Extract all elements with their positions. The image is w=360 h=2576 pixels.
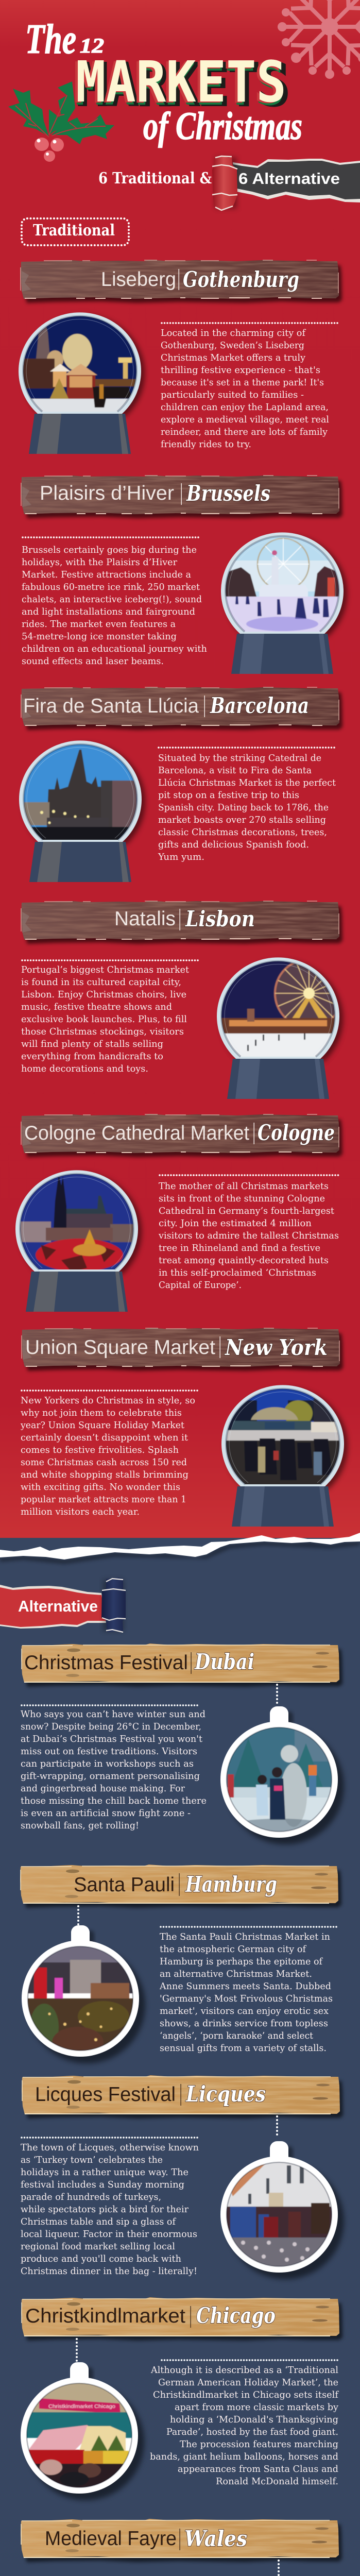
title: MARKETS <box>77 52 289 118</box>
text: Lisbon description: everything from handicrafts to <box>21 1051 163 1062</box>
torn paper reveal: 6 traditional and 6 alternative: 6 Traditional & <box>98 170 212 188</box>
text: Gothenburg description: children can enjoy the Lapland area, <box>161 402 329 413</box>
text: Barcelona description: pit stop on a festive trip to this <box>158 790 299 801</box>
text: Cologne description: Cathedral in Germany’s fourth-largest <box>159 1206 335 1216</box>
plank heading: Christmas Festival Dubai: Christmas Festival <box>24 1652 188 1674</box>
text: Cologne description <box>158 1175 339 1291</box>
text: Chicago description: holding a ‘McDonald's Thanksgiving <box>170 2414 338 2425</box>
plank heading: Medieval Fayre Wales: Wales <box>184 2526 247 2551</box>
text: New York description: year? Union Square Holiday Market <box>20 1420 185 1431</box>
title: MARKETS <box>73 50 284 116</box>
plank heading: Fira de Santa Llucia Barcelona: Fira de Santa Llúcia <box>23 695 199 717</box>
text: Chicago description: Ronald McDonald himself. <box>216 2476 338 2487</box>
text: Cologne description: visitors to admire the tallest Christmas <box>158 1230 339 1241</box>
text: Dubai description: snowball fans, get rolling! <box>21 1820 139 1831</box>
text: Chicago description: The procession features marching <box>180 2439 338 2450</box>
text: Licques description: parade of hundreds of turkeys, <box>21 2192 161 2202</box>
text: Chicago description: bands, giant helium balloons, horses and <box>150 2451 338 2462</box>
plank heading: Natalis Lisbon: Natalis <box>114 908 176 930</box>
text: Brussels description: 54-metre-long ice monster taking <box>22 631 177 642</box>
snow globe: Barcelona <box>19 740 145 882</box>
text: Dubai description: at Dubai’s Christmas Festival you won't <box>21 1734 203 1744</box>
text: Brussels description: fabulous 60-metre ice rink, 250 market <box>22 582 200 592</box>
title: 12 <box>80 34 104 57</box>
plank heading: Fira de Santa Llucia Barcelona: Barcelona <box>210 693 309 718</box>
title: MARKETS <box>75 52 285 118</box>
text: Gothenburg description: thrilling festive experience - that's <box>161 365 320 376</box>
text: Barcelona description: Spanish city. Dating back to 1786, the <box>158 802 329 813</box>
snowflake decoration <box>278 0 360 79</box>
hanging thread: Licques <box>276 2116 278 2138</box>
plank heading: Liseberg Gothenburg <box>21 260 342 303</box>
text: Gothenburg description: particularly suited to families - <box>161 389 304 400</box>
text: Brussels description: children on an educational journey with <box>22 643 207 654</box>
plank heading: Plaisirs d'Hiver Brussels: Brussels <box>186 481 270 506</box>
plank heading: Medieval Fayre Wales: Medieval Fayre <box>45 2528 177 2550</box>
background: red section <box>0 0 360 1566</box>
text: Hamburg description: market', visitors can enjoy erotic sex <box>160 2006 329 2016</box>
text: Licques description: Christmas dinner in the bag - literally! <box>21 2266 197 2277</box>
text: Chicago description <box>150 2360 339 2487</box>
text: Hamburg description: 'Germany's Most Frivolous Christmas <box>160 1993 333 2004</box>
plank heading: Santa Pauli Hamburg <box>20 1865 341 1908</box>
text: Licques description <box>21 2138 199 2277</box>
text: New York description: and white shopping stalls brimming <box>21 1469 188 1480</box>
text: Dubai description: is even an artificial snow fight zone - <box>21 1808 191 1819</box>
text: Chicago description: appearances from Santa Claus and <box>178 2464 338 2475</box>
text: New York description <box>20 1391 199 1517</box>
text: Chicago description: Although it is described as a ‘Traditional <box>150 2365 338 2376</box>
text: New York description: certainly doesn’t disappoint when it <box>21 1432 188 1443</box>
text: Brussels description: chalets, an interactive iceberg(!), sound <box>22 594 202 605</box>
text: Cologne description: city. Join the estimated 4 million <box>159 1218 312 1229</box>
text: Lisbon description: home decorations and toys. <box>21 1063 148 1074</box>
plank heading: Plaisirs d'Hiver Brussels: Plaisirs d’Hiver <box>40 482 174 504</box>
bauble: Chicago <box>21 2362 144 2500</box>
text: Chicago description: German American Holiday Market’, the <box>158 2377 338 2388</box>
text: Barcelona description: Barcelona, a visit to Fira de Santa <box>158 765 312 776</box>
bauble: Licques <box>220 2141 344 2279</box>
text: Lisbon description: Lisbon. Enjoy Christmas choirs, live <box>21 989 186 1000</box>
hanging thread: Hamburg <box>77 1906 79 1925</box>
plank heading: Medieval Fayre Wales <box>21 2519 342 2562</box>
text: Hamburg description: an alternative Christmas Market. <box>160 1969 312 1979</box>
text: Hamburg description <box>159 1927 338 2054</box>
plank heading: Cologne Cathedral Market Cologne: Cologne Cathedral Market <box>24 1122 249 1144</box>
text: New York description: million visitors each year. <box>21 1506 140 1517</box>
text: Lisbon description: exclusive book launches. Plus, to fill <box>21 1014 187 1025</box>
text: Gothenburg description: Located in the charming city of <box>161 328 306 338</box>
plank heading: Licques Festival Licques: Licques Festival <box>35 2083 176 2106</box>
text: Brussels description: sound effects and laser beams. <box>22 656 164 667</box>
text: Licques description: regional food market selling local <box>21 2241 175 2252</box>
plank heading: Licques Festival Licques: Licques <box>185 2081 266 2107</box>
plank heading: Liseberg Gothenburg: Liseberg <box>101 268 176 291</box>
text: Hamburg description: shows, a drinks service from topless <box>160 2018 328 2029</box>
plank heading: Union Square Market New York <box>22 1328 343 1371</box>
text: Lisbon description <box>21 960 199 1074</box>
text: Brussels description: holidays, with the Plaisirs d’Hiver <box>22 557 177 568</box>
text: Brussels description: Brussels certainly goes big during the <box>22 545 197 555</box>
holly leaves and berries <box>8 81 114 162</box>
section label: traditional: Traditional <box>33 222 115 240</box>
text: Chicago description: apart from more classic markets by <box>175 2402 339 2413</box>
background: navy section <box>0 1538 360 2576</box>
bauble: Chicago: Christkindlmarket Chicago <box>48 2404 115 2410</box>
plank heading: Cologne Cathedral Market Cologne: Cologne <box>258 1120 335 1145</box>
section label: traditional <box>22 218 129 245</box>
text: Chicago description: Parade’, hosted by the fast food giant. <box>166 2427 338 2437</box>
plank heading: Christkindlmarket Chicago: Chicago <box>196 2303 276 2328</box>
text: Hamburg description: The Santa Pauli Christmas Market in <box>160 1931 330 1942</box>
text: Dubai description: gift-wrapping, ornament personalising <box>21 1771 200 1782</box>
hanging thread: Wales <box>278 2561 280 2576</box>
text: Cologne description: in this self-proclaimed ‘Christmas <box>159 1267 316 1278</box>
plank heading: Natalis Lisbon: Lisbon <box>185 906 255 931</box>
text: Gothenburg description: reindeer, and there are lots of family <box>161 427 328 437</box>
text: Barcelona description: Situated by the striking Catedral de <box>158 753 321 764</box>
text: Dubai description: Who says you can’t have winter sun and <box>21 1709 205 1720</box>
plank heading: Santa Pauli Hamburg: Santa Pauli <box>74 1874 175 1896</box>
plank heading: Licques Festival Licques <box>22 2075 343 2119</box>
text: Gothenburg description: explore a medieval village, meet real <box>161 414 329 425</box>
snow globe: New York <box>221 1385 348 1527</box>
text: Cologne description: The mother of all Christmas markets <box>159 1181 329 1192</box>
text: Cologne description: tree in Rhineland and find a festive <box>159 1243 320 1253</box>
plank heading: Christkindlmarket Chicago <box>21 2297 342 2341</box>
text: Hamburg description: Anne Summers meets Santa. Dubbed <box>159 1981 331 1992</box>
text: Barcelona description: market boasts over 270 stalls selling <box>158 815 326 825</box>
plank heading: Union Square Market New York: New York <box>224 1335 328 1360</box>
text: Cologne description: treat among quaintly-decorated huts <box>159 1255 329 1266</box>
text: New York description: why not join them to celebrate this <box>21 1408 182 1418</box>
text: Hamburg description: ‘angels’, ‘porn karaoke’ and select <box>160 2030 314 2041</box>
section label: alternative torn banner: Alternative <box>18 1597 98 1615</box>
text: Licques description: local liqueur. Factor in their enormous <box>21 2229 197 2240</box>
text: Dubai description <box>21 1705 207 1831</box>
text: Chicago description: Christkindlmarket in Chicago sets itself <box>153 2389 339 2400</box>
torn paper reveal: 6 traditional and 6 alternative <box>98 156 360 210</box>
text: Lisbon description: will find plenty of stalls selling <box>21 1039 163 1049</box>
text: New York description: New Yorkers do Christmas in style, so <box>21 1395 195 1406</box>
plank heading: Fira de Santa Llucia Barcelona <box>21 687 342 730</box>
bauble: Dubai <box>220 1706 344 1844</box>
text: Brussels description: rides. The market even features a <box>22 619 176 630</box>
text: Lisbon description: those Christmas stockings, visitors <box>21 1026 184 1037</box>
text: Licques description: festival includes a Sunday morning <box>21 2179 184 2190</box>
plank heading: Cologne Cathedral Market Cologne <box>21 1114 342 1157</box>
text: New York description: with exciting gifts. No wonder this <box>21 1482 180 1493</box>
text: New York description: popular market attracts more than 1 <box>21 1494 186 1505</box>
text: Gothenburg description: friendly rides to try. <box>161 439 251 450</box>
text: Gothenburg description: because it's set in a theme park! It's <box>161 377 324 388</box>
bauble: Hamburg <box>22 1925 145 2063</box>
text: New York description: comes to festive frivolities. Splash <box>21 1445 179 1455</box>
text: New York description: some Christmas cash across 150 red <box>21 1457 187 1468</box>
snow globe: Cologne <box>15 1170 142 1312</box>
text: Barcelona description: Yum yum. <box>158 852 204 862</box>
text: Gothenburg description: Gothenburg, Sweden’s Liseberg <box>161 340 304 351</box>
text: Hamburg description: the atmospheric German city of <box>160 1944 306 1955</box>
text: Brussels description: and light installations and fairground <box>22 606 195 617</box>
text: Hamburg description: sensual gifts from a variety of stalls. <box>160 2043 327 2054</box>
text: Dubai description: those missing the chill back home there <box>21 1795 207 1806</box>
plank heading: Union Square Market New York: Union Square Market <box>25 1336 215 1359</box>
snow globe: Lisbon <box>216 957 343 1099</box>
text: Dubai description: miss out on festive traditions. Visitors <box>21 1746 197 1757</box>
hanging thread: Dubai <box>276 1685 278 1706</box>
plank heading: Natalis Lisbon <box>21 901 342 944</box>
plank heading: Santa Pauli Hamburg: Hamburg <box>185 1872 277 1897</box>
text: Barcelona description: gifts and delicious Spanish food. <box>158 839 309 850</box>
text: Cologne description: sits in front of the stunning Cologne <box>159 1193 325 1204</box>
text: Licques description: while spectators pick a bird for their <box>21 2204 188 2215</box>
title: MARKETS <box>76 49 286 115</box>
text: Lisbon description: Portugal’s biggest Christmas market <box>21 964 190 975</box>
text: Licques description: holidays in a rather unique way. The <box>21 2167 188 2178</box>
plank heading: Liseberg Gothenburg: Gothenburg <box>183 267 299 292</box>
text: Licques description: as ‘Turkey town’ celebrates the <box>21 2155 163 2165</box>
torn paper divider between red and navy sections <box>0 1533 360 1564</box>
plank heading: Christkindlmarket Chicago: Christkindlmarket <box>25 2305 185 2327</box>
text: Cologne description: Capital of Europe’. <box>159 1280 242 1291</box>
text: Gothenburg description <box>161 323 339 450</box>
text: Hamburg description: Hamburg is perhaps the epitome of <box>160 1956 323 1967</box>
title <box>25 15 302 148</box>
hanging thread: Chicago <box>76 2339 78 2362</box>
text: Barcelona description: Llúcia Christmas Market is the perfect <box>158 777 336 788</box>
text: Lisbon description: is found in its cultured capital city, <box>21 977 181 988</box>
text: Lisbon description: music, festive theatre shows and <box>21 1002 172 1012</box>
plank heading: Plaisirs d'Hiver Brussels <box>21 475 342 518</box>
text: Dubai description: can participate in workshops such as <box>21 1758 194 1769</box>
text: Dubai description: and gingerbread house making. For <box>21 1783 185 1794</box>
text: Licques description: The town of Licques, otherwise known <box>21 2142 199 2153</box>
text: Dubai description: snow? Despite being 26°C in December, <box>21 1721 201 1732</box>
text: Barcelona description <box>158 748 336 862</box>
plank heading: Christmas Festival Dubai: Dubai <box>194 1649 254 1674</box>
title: The <box>25 15 76 62</box>
snow globe: Gothenburg <box>18 312 145 454</box>
text: Gothenburg description: Christmas Market offers a truly <box>161 352 306 363</box>
text: Licques description: Christmas table and sip a glass of <box>21 2216 176 2227</box>
text: Barcelona description: classic Christmas decorations, trees, <box>158 827 327 838</box>
plank heading: Christmas Festival Dubai <box>21 1643 342 1687</box>
text: Brussels description <box>22 537 207 667</box>
text: Brussels description: Market. Festive attractions include a <box>22 569 191 580</box>
snow globe: Brussels <box>220 532 347 674</box>
text: Licques description: produce and you'll come back with <box>21 2253 181 2264</box>
torn paper reveal: 6 traditional and 6 alternative: 6 Alternative <box>238 170 340 188</box>
section label: alternative torn banner <box>0 1578 126 1632</box>
title: of Christmas <box>143 105 302 148</box>
